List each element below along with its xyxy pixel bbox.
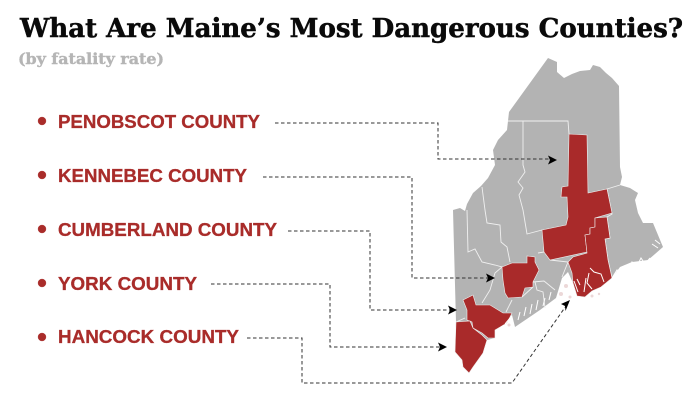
leader lines <box>211 123 566 383</box>
island in bay <box>592 278 600 286</box>
offshore islands <box>508 284 600 326</box>
arrowheads <box>438 156 570 352</box>
map of Maine <box>453 58 663 373</box>
arrowhead: Kennebec <box>486 274 495 282</box>
arrowhead: York <box>438 342 447 352</box>
list item: Kennebec County: KENNEBEC COUNTY <box>58 165 248 186</box>
Kennebec County <box>502 256 539 298</box>
title: What Are Maine’s Most Dangerous Counties? <box>19 14 683 44</box>
list item: Hancock County: HANCOCK COUNTY <box>58 326 240 347</box>
arrowhead: Cumberland <box>448 306 457 314</box>
Penobscot County <box>542 134 612 260</box>
arrowhead: Penobscot <box>548 156 557 164</box>
subtitle: (by fatality rate) <box>18 50 164 68</box>
list item: Cumberland County: CUMBERLAND COUNTY <box>58 219 278 240</box>
leader: Penobscot <box>275 123 552 159</box>
York County <box>455 321 487 373</box>
leader: Cumberland <box>288 231 452 310</box>
leader: Kennebec <box>263 177 490 278</box>
Hancock County <box>568 217 612 297</box>
list item: Penobscot County: PENOBSCOT COUNTY <box>58 111 261 132</box>
county borders <box>456 121 620 322</box>
state outline <box>453 58 663 373</box>
leader: Hancock <box>247 306 566 383</box>
leader: York <box>211 284 442 347</box>
coastline fringe <box>500 240 660 328</box>
county list <box>38 111 278 347</box>
arrowhead: Hancock <box>561 300 570 311</box>
Cumberland County <box>463 295 512 338</box>
list item: York County: YORK COUNTY <box>58 273 198 294</box>
